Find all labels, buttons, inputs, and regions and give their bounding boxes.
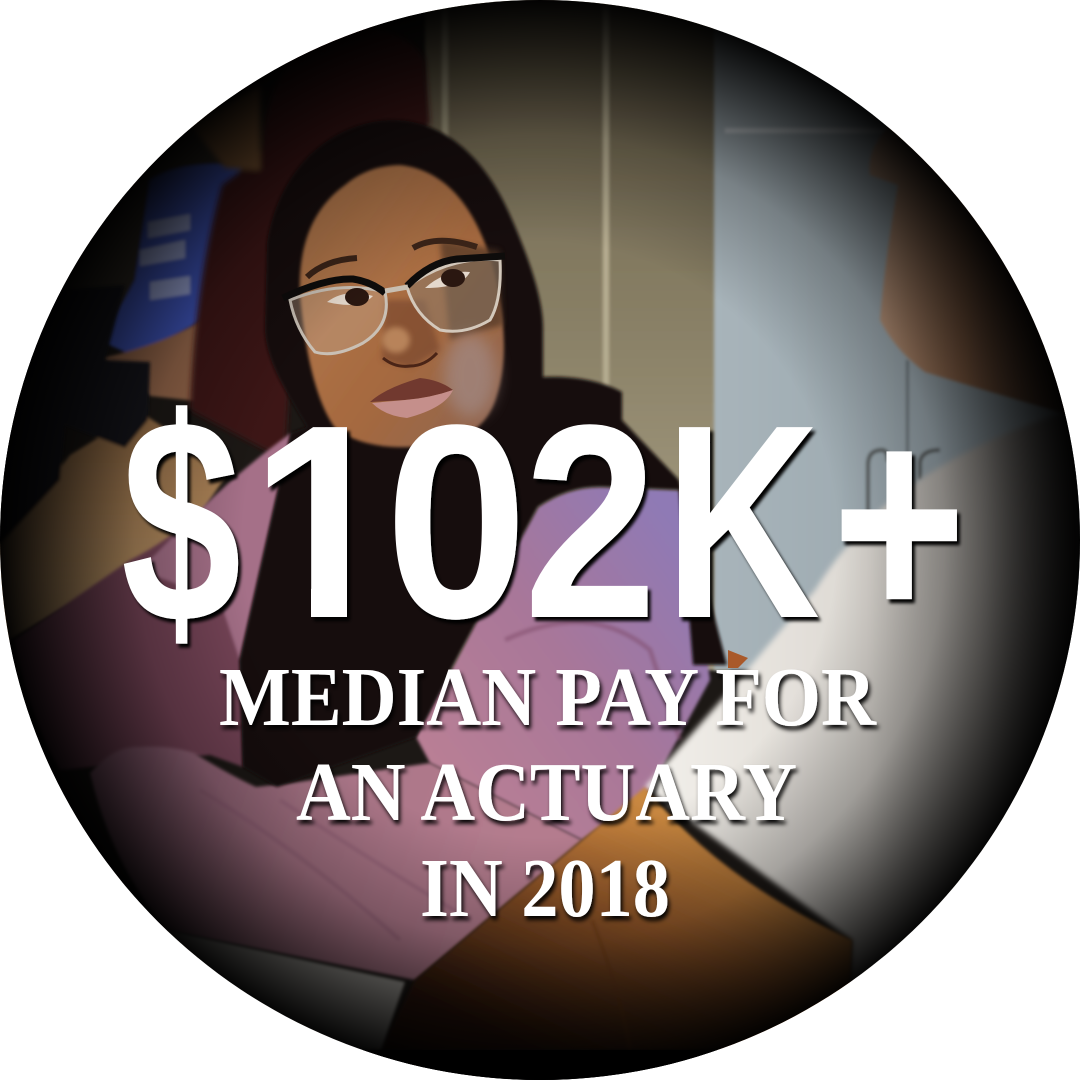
face: shaded side by eye <box>440 240 503 340</box>
notebook <box>150 930 405 1050</box>
face: lower lip <box>372 390 453 418</box>
woman: black hijab <box>240 120 727 787</box>
face: pale cheek <box>444 333 496 417</box>
face: left brow <box>307 258 357 277</box>
face: right brow <box>413 241 477 248</box>
face: nose highlight <box>382 327 410 353</box>
background: grey cabinets <box>714 0 1080 670</box>
face: nostril line <box>383 353 437 366</box>
man: white shirt <box>643 414 1080 982</box>
left eye <box>327 293 373 305</box>
caption line 3: IN 2018 <box>420 842 670 935</box>
right eye <box>425 272 470 288</box>
right lens <box>407 259 500 331</box>
woman: glasses <box>283 256 505 354</box>
caption line 1: MEDIAN PAY FOR <box>219 651 877 744</box>
caption <box>219 651 877 935</box>
frame top rims <box>283 256 505 298</box>
bottom black strip <box>363 1050 717 1080</box>
woman: face <box>300 165 504 447</box>
woman: forearm in pink sweater <box>90 747 582 980</box>
face: upper lip <box>370 378 453 402</box>
background: person in maroon <box>190 20 430 460</box>
chair edge <box>728 650 748 668</box>
dollar sign: $ <box>121 358 241 685</box>
digit 1: 1 <box>250 368 396 676</box>
digit 0: 0 <box>385 368 528 676</box>
headline figure <box>124 405 962 650</box>
background: person in blue shirt <box>60 100 250 402</box>
caption line 2: AN ACTUARY <box>296 746 797 839</box>
woman: dark left sleeve <box>14 433 291 770</box>
digit 2: 2 <box>524 367 657 676</box>
face: nose shading <box>382 300 440 368</box>
background: beige wall <box>425 0 730 670</box>
plus sign: + <box>832 359 966 684</box>
woman: right sleeve <box>416 487 710 840</box>
man: arm <box>381 787 852 1050</box>
man: head <box>870 127 1066 415</box>
left lens <box>290 288 386 354</box>
letter K: K <box>665 368 820 676</box>
desk and camera <box>0 285 230 645</box>
